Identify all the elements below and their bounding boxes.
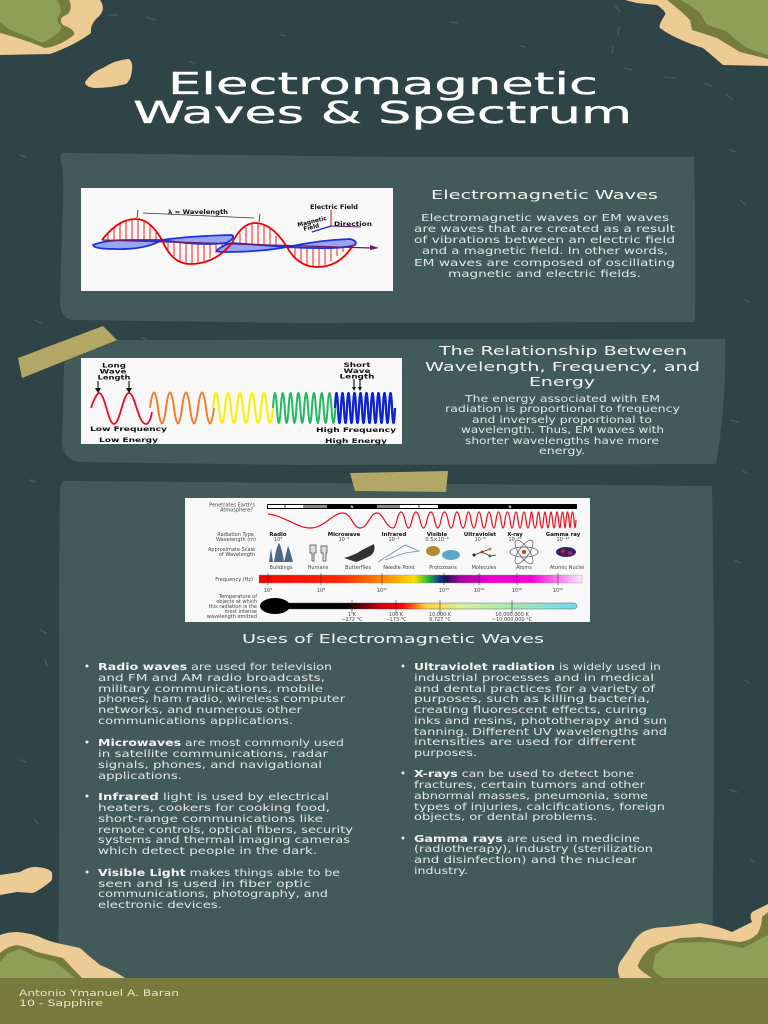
footer credits: Antonio Ymanuel A. Baran	[19, 988, 179, 999]
heading: electromagnetic waves: Electromagnetic Waves	[431, 188, 658, 202]
text: electromagnetic waves description	[414, 213, 676, 280]
title	[133, 67, 632, 131]
image: wavelength frequency energy diagram: Low Frequency	[90, 426, 167, 433]
item: x-rays	[402, 769, 665, 823]
heading: relationship between wavelength, frequency and energy: Energy	[529, 375, 595, 389]
panel: uses of electromagnetic waves	[58, 481, 714, 978]
spectrum row labels: Wavelength (m)	[216, 537, 256, 543]
atmosphere bar: N	[351, 505, 354, 509]
item: infrared: systems and thermal imaging cameras	[98, 835, 350, 846]
atmosphere bar: N	[509, 505, 512, 509]
image: wavelength frequency energy diagram: Length	[340, 374, 374, 380]
heading: relationship between wavelength, frequency and energy: Wavelength, Frequency, and	[425, 360, 700, 374]
item: x-rays: X-rays can be used to detect bone	[414, 769, 634, 780]
item: ultraviolet radiation: and dental practices for a variety of	[414, 684, 656, 695]
item: ultraviolet radiation: intensities are used for different	[414, 737, 637, 748]
item: microwaves: in satellite communications, radar	[98, 749, 328, 760]
island: bottom left	[0, 932, 125, 978]
item: radio waves: and FM and AM radio broadcasts,	[98, 673, 325, 684]
footer credits: 10 - Sapphire	[19, 998, 103, 1009]
spectrum band names: Buildings	[270, 565, 293, 571]
spectrum band names: Microwave	[328, 532, 361, 538]
item: ultraviolet radiation	[402, 662, 667, 759]
image: electromagnetic wave diagram: Direction	[334, 221, 372, 228]
item: microwaves	[86, 738, 344, 782]
frequency bar: 10¹⁵	[439, 588, 449, 594]
chirped wave	[268, 512, 576, 528]
sand blob: top	[85, 59, 132, 88]
spectrum row labels: most intense	[224, 609, 257, 615]
spectrum band names: Visible	[427, 532, 448, 538]
island: top right	[625, 0, 768, 66]
list: right column uses	[402, 662, 667, 877]
footer band	[0, 978, 768, 1024]
sand blob: left	[0, 867, 52, 895]
island: top left	[0, 0, 103, 55]
item: visible light: Visible Light makes things able to be	[98, 868, 340, 879]
spectrum band names: Ultraviolet	[464, 532, 497, 538]
item: ultraviolet radiation: tanning. Different UV wavelengths and	[414, 727, 667, 738]
image: electromagnetic wave diagram	[81, 188, 393, 291]
item: x-rays: objects, or dental problems.	[414, 812, 597, 823]
spectrum band names: Atoms	[516, 565, 532, 571]
spectrum band names: Protozoans	[429, 565, 457, 571]
spectrum band names: Atomic Nuclei	[550, 565, 584, 571]
image: electromagnetic wave diagram: Magnetic	[297, 215, 328, 229]
image: electromagnetic wave diagram: Field	[303, 222, 320, 233]
frequency bar: 10⁴	[264, 588, 272, 594]
temperature thermometer: 100 K	[389, 612, 404, 618]
temperature thermometer: ~10,000,000 °C	[492, 617, 533, 623]
temperature thermometer: 10,000 K	[429, 612, 452, 618]
text: energy relationship description: wavelength. Thus, EM waves with	[461, 425, 664, 436]
spectrum row labels: Penetrates Earth's	[209, 502, 255, 508]
atmosphere bar	[267, 504, 577, 509]
temperature thermometer	[260, 598, 577, 623]
scale icons	[269, 538, 576, 566]
image: wavelength frequency energy diagram: Long	[102, 362, 126, 370]
panel: electromagnetic waves	[60, 153, 695, 323]
title: Electromagnetic	[168, 67, 598, 102]
spectrum band names: 10⁻¹²	[556, 537, 570, 543]
spectrum row labels: Approximate Scale	[208, 547, 255, 553]
image: wavelength frequency energy diagram: High Energy	[325, 438, 387, 445]
text: electromagnetic waves description: are waves that are created as a result	[414, 224, 676, 235]
spectrum band names: 0.5×10⁻⁶	[425, 537, 449, 543]
item: visible light: communications, photography, and	[98, 889, 328, 900]
item: ultraviolet radiation: industrial processes and in medical	[414, 673, 654, 684]
spectrum row labels: this radiation is the	[209, 604, 257, 610]
spectrum band names: 10⁻¹⁰	[508, 537, 522, 543]
spectrum row labels: Temperature of	[218, 594, 257, 600]
spectrum row labels: Frequency (Hz)	[215, 577, 253, 583]
spectrum row labels: wavelength emitted	[207, 614, 257, 620]
spectrum band names: 10⁻⁵	[388, 537, 400, 543]
image: wavelength frequency energy diagram: High Frequency	[316, 427, 396, 434]
item: radio waves: networks, and numerous other	[98, 705, 302, 716]
item: infrared: short-range communications like	[98, 814, 323, 825]
spectrum row labels: objects at which	[216, 599, 257, 605]
title: Waves & Spectrum	[133, 96, 632, 131]
text: energy relationship description: radiation is proportional to frequency	[445, 404, 681, 415]
item: x-rays: abnormal masses, pneumonia, some	[414, 791, 648, 802]
image: wavelength frequency energy diagram: Low Energy	[99, 437, 158, 444]
heading: relationship between wavelength, frequency and energy: The Relationship Between	[437, 344, 687, 358]
spectrum band names: 10³	[274, 537, 282, 543]
item: radio waves: communications applications.	[98, 716, 293, 727]
image: wavelength frequency energy diagram: Short	[344, 362, 371, 369]
spectrum band names	[269, 532, 584, 571]
spectrum band names: Gamma ray	[546, 532, 581, 538]
spectrum row labels: Radiation Type	[217, 532, 254, 538]
heading: uses of electromagnetic waves: Uses of Electromagnetic Waves	[242, 632, 544, 646]
text: electromagnetic waves description: EM waves are composed of oscillating	[414, 258, 675, 269]
panel: relationship between wavelength, frequency and energy	[62, 339, 725, 465]
spectrum row labels: Atmosphere?	[220, 508, 253, 514]
temperature thermometer: 1 K	[348, 612, 357, 618]
text: electromagnetic waves description: and a magnetic field. In other words,	[422, 246, 668, 257]
item: visible light	[86, 868, 340, 911]
spectrum band names: Butterflies	[345, 565, 371, 571]
tape: centre	[350, 471, 448, 492]
text: energy relationship description: shorter wavelengths have more	[465, 436, 659, 447]
spectrum band names: Needle Point	[383, 565, 415, 571]
frequency bar: 10¹²	[377, 588, 387, 594]
footer credits	[19, 988, 179, 1009]
text: electromagnetic waves description: Electromagnetic waves or EM waves	[421, 213, 669, 224]
list: left column uses	[86, 662, 354, 911]
item: ultraviolet radiation: purposes.	[414, 748, 477, 759]
item: x-rays: types of injuries, calcifications, foreign	[414, 802, 665, 813]
spectrum band names: Radio	[269, 532, 287, 538]
temperature thermometer: −272 °C	[341, 617, 363, 623]
frequency bar: 10²⁰	[553, 588, 563, 594]
item: radio waves: phones, ham radio, wireless computer	[98, 694, 345, 705]
spectrum row labels: of Wavelength	[219, 552, 255, 558]
frequency bar: 10¹⁸	[512, 588, 522, 594]
item: gamma rays	[402, 834, 653, 877]
spectrum row labels	[207, 502, 257, 620]
item: ultraviolet radiation: creating fluorescent effects, curing	[414, 705, 647, 716]
item: infrared: Infrared light is used by electrical	[98, 792, 329, 803]
item: ultraviolet radiation: Ultraviolet radiation is widely used in	[414, 662, 661, 673]
item: microwaves: Microwaves are most commonly used	[98, 738, 344, 749]
item: ultraviolet radiation: purposes, such as killing bacteria,	[414, 694, 650, 705]
text: energy relationship description: and inversely proportional to	[472, 415, 652, 426]
image: wavelength frequency energy diagram: Length	[98, 374, 130, 382]
item: visible light: seen and is used in fiber optic	[98, 879, 311, 890]
text: energy relationship description: The energy associated with EM	[464, 394, 660, 405]
item: infrared: heaters, cookers for cooking food,	[98, 803, 330, 814]
image: electromagnetic wave diagram: λ = Wavelength	[168, 209, 228, 216]
item: gamma rays: (radiotherapy), industry (sterilization	[414, 844, 653, 855]
frequency bar: 10⁸	[317, 588, 325, 594]
spectrum band names: X-ray	[507, 532, 523, 538]
text: energy relationship description	[445, 394, 681, 457]
temperature thermometer: −173 °C	[385, 617, 407, 623]
item: radio waves	[86, 662, 345, 727]
image: electromagnetic spectrum chart	[185, 498, 590, 623]
text: electromagnetic waves description: of vibrations between an electric field	[414, 235, 675, 246]
text: electromagnetic waves description: magnetic and electric fields.	[448, 269, 641, 280]
image: electromagnetic wave diagram: Electric Field	[310, 204, 358, 211]
frequency bar: 10¹⁶	[474, 588, 484, 594]
item: visible light: electronic devices.	[98, 900, 222, 911]
item: infrared	[86, 792, 354, 857]
item: gamma rays: and disinfection) and the nuclear	[414, 855, 637, 866]
temperature thermometer: 9,727 °C	[429, 617, 451, 623]
spectrum band names: Molecules	[472, 565, 497, 571]
spectrum band names: Humans	[308, 565, 329, 571]
item: gamma rays: Gamma rays are used in medicine	[414, 834, 640, 845]
item: microwaves: signals, phones, and navigational	[98, 760, 322, 771]
item: radio waves: Radio waves are used for television	[98, 662, 332, 673]
image: wavelength frequency energy diagram: Wave	[344, 368, 370, 375]
atmosphere bar: Y	[283, 505, 287, 509]
heading: relationship between wavelength, frequency and energy	[425, 344, 700, 389]
item: radio waves: military communications, mobile	[98, 684, 323, 695]
item: microwaves: applications.	[98, 771, 182, 782]
tape: upper left	[18, 326, 117, 378]
item: gamma rays: industry.	[414, 866, 468, 877]
island: bottom right	[618, 904, 768, 978]
item: infrared: remote controls, optical fibers, security	[98, 825, 354, 836]
item: ultraviolet radiation: inks and resins, phototherapy and sun	[414, 716, 667, 727]
atmosphere bar: Y	[417, 505, 421, 509]
item: infrared: which detect people in the dark.	[98, 846, 317, 857]
temperature thermometer: 10,000,000 K	[495, 612, 529, 618]
item: x-rays: fractures, certain tumors and other	[414, 780, 645, 791]
spectrum band names: Infrared	[382, 532, 406, 538]
spectrum band names: 10⁻²	[338, 537, 350, 543]
image: wavelength frequency energy diagram	[81, 358, 402, 445]
text: energy relationship description: energy.	[539, 446, 585, 457]
spectrum band names: 10⁻⁸	[474, 537, 486, 543]
image: wavelength frequency energy diagram: Wave	[100, 368, 126, 376]
frequency bar	[259, 573, 582, 594]
